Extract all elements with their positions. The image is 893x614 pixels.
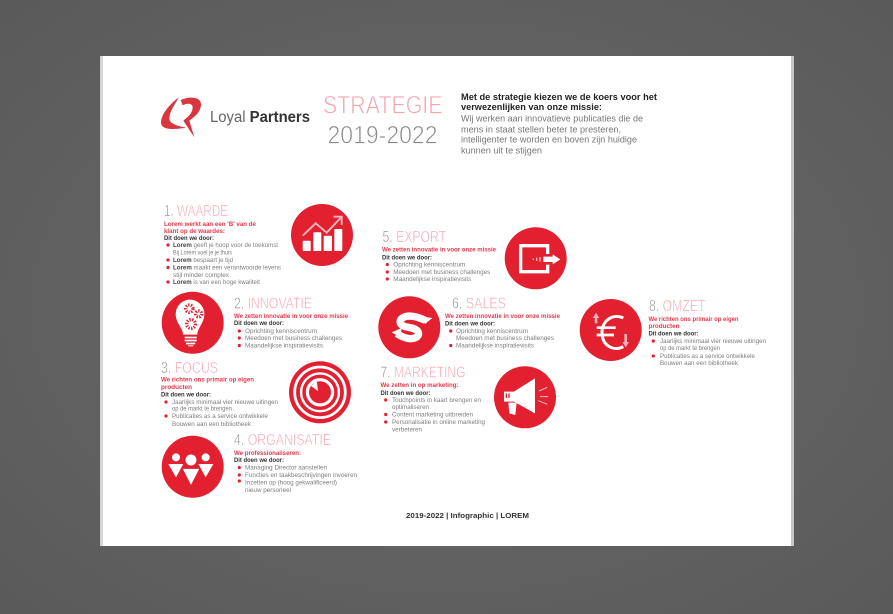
text block: innovatie bbox=[234, 314, 349, 350]
text block: export: Meedoen met business challenges bbox=[393, 270, 490, 276]
logo wordmark: Loyal Partners bbox=[210, 109, 310, 126]
mission statement: mens in staat stellen beter te presteren, bbox=[461, 124, 621, 136]
text block: export: Maandelijkse inspiratievisits bbox=[393, 277, 471, 283]
panel: 8 omzet bbox=[580, 298, 766, 367]
text block: waarde: Lorem maakt een verantwoorde levens bbox=[173, 266, 281, 272]
logo mark bbox=[161, 97, 201, 137]
text block: focus bbox=[161, 378, 278, 428]
text block: focus: op de markt te brengen bbox=[172, 406, 232, 412]
text block: organisatie: Functies en taakbeschrijvingen invoeren bbox=[245, 473, 357, 479]
text block: innovatie: Maandelijkse inspiratievisits bbox=[245, 344, 323, 350]
panel: 1 waarde bbox=[164, 203, 353, 286]
icon: stylised S bbox=[378, 296, 440, 358]
text block: waarde: Lorem is van een hoge kwaliteit bbox=[173, 280, 260, 286]
text block: omzet: We richten ons primair op eigen bbox=[648, 317, 739, 323]
text block: focus: Jaarlijks minimaal vier nieuwe uitingen bbox=[172, 400, 278, 406]
title: 2019-2022 bbox=[328, 122, 438, 150]
panel: 7 marketing bbox=[380, 364, 556, 434]
icon: export arrow bbox=[505, 227, 567, 289]
panel: 2 innovatie bbox=[162, 292, 349, 354]
text block: waarde: Lorem geeft je hoop voor de toekomst bbox=[173, 243, 278, 249]
text block: organisatie: nieuw personeel bbox=[245, 488, 291, 494]
title: STRATEGIE bbox=[323, 92, 442, 120]
footer: 2019-2022 | Infographic | LOREM bbox=[406, 511, 529, 520]
icon: light bulb bbox=[162, 292, 224, 354]
text block: sales: Oprichting kenniscentrum bbox=[456, 329, 528, 335]
mission statement: intelligenter te worden en boven zijn huidige bbox=[461, 134, 637, 146]
mission statement: verwezenlijken van onze missie: bbox=[461, 102, 602, 113]
text block: marketing: Content marketing uitbreiden bbox=[392, 412, 473, 418]
text block: focus: Publicaties as a service ontwikkele bbox=[172, 414, 269, 420]
text block: focus: producten bbox=[161, 385, 192, 391]
text block: marketing: Dit doen we door: bbox=[380, 391, 430, 397]
heading: export: 5. EXPORT bbox=[382, 229, 446, 246]
text block: omzet: Publicaties as a service ontwikkele bbox=[660, 354, 756, 360]
mission statement: Met de strategie kiezen we de koers voor het bbox=[461, 92, 658, 103]
panel: 6 sales bbox=[378, 296, 561, 358]
text block: export: We zetten innovatie in voor onze missie bbox=[382, 248, 497, 254]
text block: marketing: We zetten in op marketing: bbox=[380, 383, 458, 389]
text block: sales: Meedoen met business challenges bbox=[456, 336, 554, 342]
heading: organisatie: 4. ORGANISATIE bbox=[234, 432, 331, 449]
text block: waarde: stijl minder complex bbox=[173, 273, 229, 279]
heading: sales: 6. SALES bbox=[452, 296, 506, 312]
icon: target bbox=[289, 361, 351, 423]
text block: innovatie: Oprichting kenniscentrum bbox=[245, 329, 317, 335]
text block: omzet: Bouwen aan een bibliotheek bbox=[660, 361, 739, 367]
text block: waarde: Dit doen we door: bbox=[164, 236, 214, 242]
text block: export: Dit doen we door: bbox=[382, 256, 432, 262]
text block: waarde bbox=[164, 222, 281, 286]
text block: waarde: Lorem werkt aan een 'B' van de bbox=[164, 222, 257, 228]
text block: omzet: op de markt te brengen bbox=[660, 346, 720, 352]
mission statement bbox=[461, 92, 658, 156]
icon: people bbox=[162, 436, 224, 498]
panel: 5 export bbox=[382, 227, 567, 289]
text block: organisatie bbox=[234, 451, 357, 494]
panel: 3 focus bbox=[161, 360, 351, 428]
text block: innovatie: We zetten innovatie in voor onze missie bbox=[234, 314, 349, 320]
heading: focus: 3. FOCUS bbox=[161, 360, 218, 377]
heading: innovatie: 2. INNOVATIE bbox=[234, 296, 312, 312]
title bbox=[323, 92, 442, 150]
paper sheet bbox=[100, 56, 794, 546]
heading: marketing: 7. MARKETING bbox=[380, 364, 466, 382]
text block: marketing: Personalisatie in online marketing bbox=[392, 420, 485, 426]
text block: waarde: Lorem bespaart je tijd bbox=[173, 258, 233, 264]
logo: Loyal Partners bbox=[161, 97, 310, 137]
text block: innovatie: Meedoen met business challenges bbox=[245, 336, 342, 342]
text block: organisatie: Managing Director aanstellen bbox=[245, 466, 327, 472]
icon: euro with arrows bbox=[580, 299, 642, 361]
text block: sales: We zetten innovatie in voor onze missie bbox=[445, 314, 561, 320]
text block: waarde: Bij Lorem voel je je thuis bbox=[173, 250, 232, 256]
text block: marketing: Touchpoints in kaart brengen en bbox=[392, 398, 481, 404]
text block: focus: Dit doen we door: bbox=[161, 392, 211, 398]
text block: sales bbox=[445, 314, 561, 350]
text block: export: Oprichting kenniscentrum bbox=[393, 262, 465, 268]
text block: waarde: klant op de waardes: bbox=[164, 229, 225, 235]
text block: focus: Bouwen aan een bibliotheek bbox=[172, 422, 252, 428]
mission statement: Wij werken aan innovatieve publicaties die de bbox=[461, 114, 643, 124]
icon: bar chart with arrow bbox=[291, 204, 353, 266]
text block: sales: Dit doen we door: bbox=[445, 322, 495, 328]
text block: export bbox=[382, 248, 497, 283]
text block: innovatie: Dit doen we door: bbox=[234, 321, 284, 327]
text block: sales: Maandelijkse inspiratievisits bbox=[456, 344, 534, 350]
text block: organisatie: Inzetten op (hoog gekwalificeerd) bbox=[245, 480, 337, 486]
text block: omzet: producten bbox=[648, 324, 680, 330]
panel: 4 organisatie bbox=[162, 432, 357, 498]
text block: marketing: optimaliseren bbox=[392, 405, 429, 411]
text block: marketing bbox=[380, 383, 485, 434]
text block: organisatie: We professionaliseren: bbox=[234, 451, 301, 457]
text block: marketing: verbeteren bbox=[392, 428, 422, 434]
text block: omzet: Dit doen we door: bbox=[648, 332, 698, 338]
heading: waarde: 1. WAARDE bbox=[164, 203, 228, 220]
icon: megaphone bbox=[494, 366, 556, 428]
text block: focus: We richten ons primair op eigen bbox=[161, 378, 254, 384]
heading: omzet: 8. OMZET bbox=[649, 298, 706, 315]
text block: omzet bbox=[648, 317, 766, 367]
text block: organisatie: Dit doen we door: bbox=[234, 458, 284, 464]
text block: omzet: Jaarlijks minimaal vier nieuwe uitingen bbox=[660, 339, 766, 345]
mission statement: kunnen uit te stijgen bbox=[461, 146, 542, 156]
